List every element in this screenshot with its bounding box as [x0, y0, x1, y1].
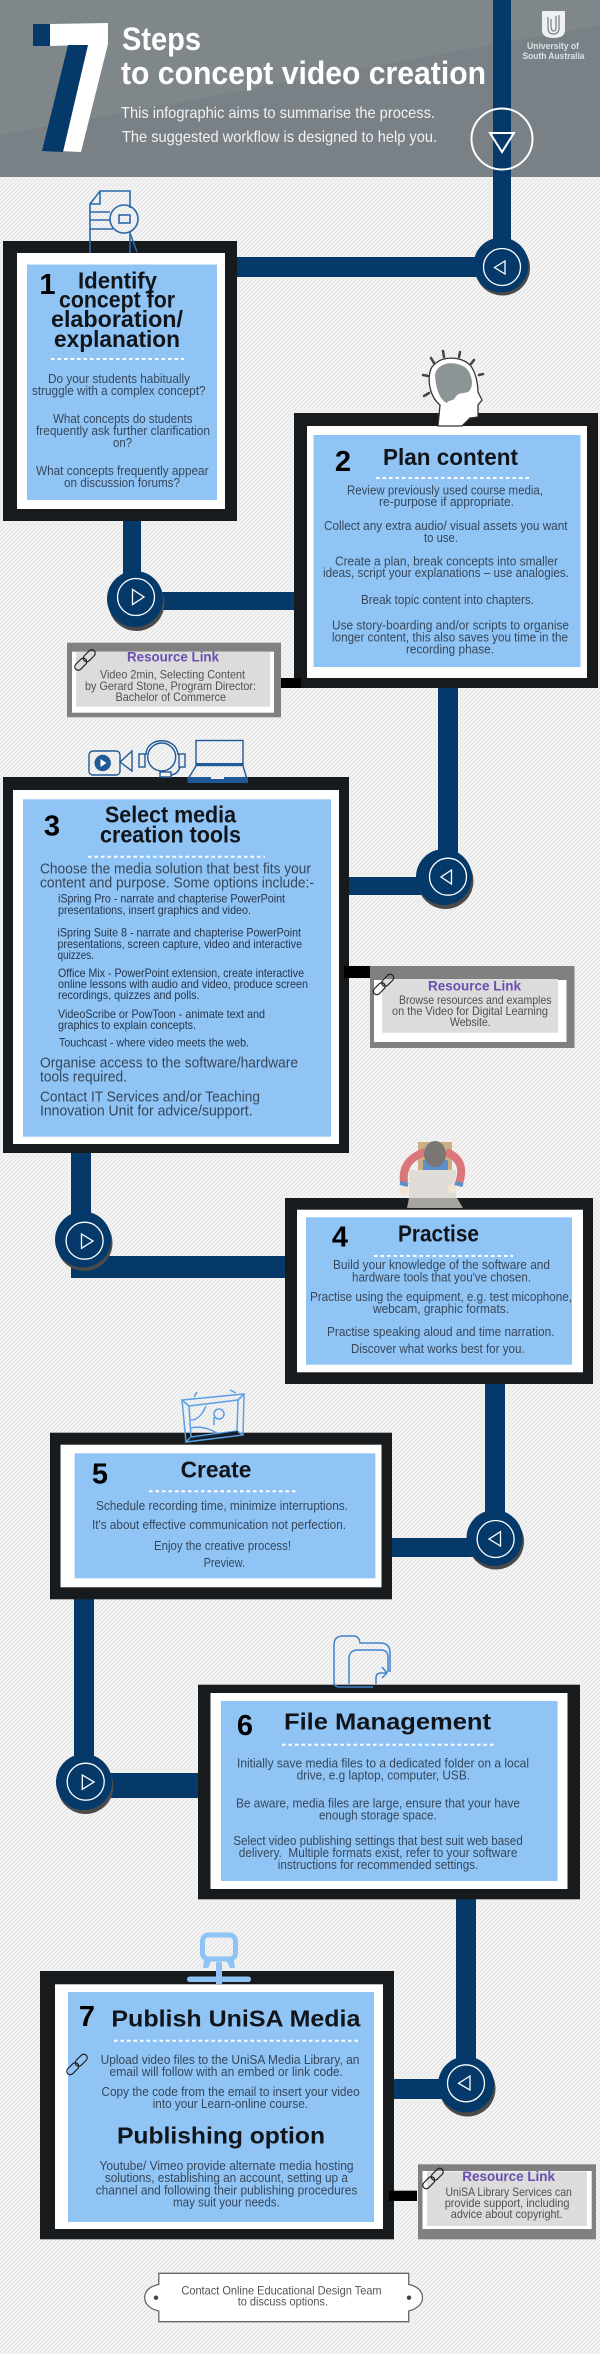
- tool options list: quizzes.: [58, 948, 94, 962]
- body text: step 5: Preview.: [204, 1555, 245, 1570]
- body text: step 5: Schedule recording time, minimize interruptions.: [96, 1498, 348, 1513]
- body text: step 4: webcam, graphic formats.: [372, 1301, 509, 1316]
- intro text: step 3: [40, 861, 314, 892]
- body text: step 6: Initially save media files to a dedicated folder on a local: [237, 1755, 529, 1770]
- callout: resource link 1: [67, 643, 301, 717]
- intro text: step 3: content and purpose. Some options include:-: [40, 876, 314, 892]
- body text: step 2: Review previously used course media,: [347, 482, 543, 498]
- icon: head with brain: [423, 351, 483, 426]
- heading: step 3: Select media: [105, 801, 236, 827]
- node: step 4 turn: [55, 1212, 112, 1271]
- panel: step 4: [285, 1198, 593, 1384]
- body text: upload: [101, 2052, 360, 2111]
- body text: step 6: drive, e.g laptop, computer, USB.: [297, 1767, 470, 1782]
- icon: person at laptop: [400, 1141, 463, 1208]
- tool options list: iSpring Suite 8 - narrate and chapterise PowerPoint: [58, 926, 302, 940]
- body text: step 2: re-purpose if appropriate.: [379, 494, 514, 509]
- step number 6: 6: [237, 1710, 253, 1742]
- body text: step 4: [310, 1257, 572, 1356]
- intro text: step 3: Choose the media solution that best fits your: [40, 861, 311, 877]
- tool options list: Touchcast - where video meets the web.: [59, 1036, 249, 1050]
- heading: step 2: Plan content: [383, 444, 518, 470]
- heading: step 6: File Management: [284, 1708, 491, 1734]
- body text: step 4: Discover what works best for you.: [351, 1341, 525, 1356]
- closing text: step 3: Organise access to the software/hardware: [40, 1055, 298, 1071]
- tool options list: Office Mix - PowerPoint extension, create interactive: [58, 966, 304, 980]
- body text: step 2: to use.: [424, 530, 458, 545]
- body text: step 1: Do your students habitually: [48, 371, 190, 386]
- body text: step 2: Break topic content into chapters.: [361, 592, 534, 607]
- connector road: step 4 to step 5: [392, 1384, 505, 1557]
- step number 1: 1: [39, 269, 56, 301]
- node: step 2 turn: [107, 571, 164, 631]
- panel: step 1: [3, 241, 237, 521]
- panel: step 5: [50, 1433, 392, 1599]
- connector road: header to step 1: [237, 0, 511, 277]
- body text: step 1: What concepts frequently appear: [36, 463, 209, 478]
- connector road: step 5 to step 6: [74, 1599, 200, 1798]
- body text: upload: into your Learn-online course.: [153, 2096, 308, 2111]
- step number 7: 7: [79, 2001, 95, 2033]
- body text: step 1: struggle with a complex concept?: [32, 383, 206, 398]
- panel: step 2: [294, 413, 598, 688]
- node: step 7 turn: [438, 2056, 496, 2116]
- resource link text: on the Video for Digital Learning: [392, 1004, 548, 1018]
- resource link text: Browse resources and examples: [399, 993, 552, 1007]
- body text: step 2: Collect any extra audio/ visual assets you want: [324, 518, 568, 533]
- heading: step 1: concept for: [59, 286, 175, 312]
- callout: resource link 3: [389, 2164, 596, 2239]
- node: step 6 turn: [56, 1754, 114, 1814]
- heading: step 1: elaboration/: [51, 306, 184, 332]
- body text: step 1: What concepts do students: [53, 411, 193, 426]
- resource link text: by Gerard Stone, Program Director:: [85, 679, 256, 693]
- tool options list: VideoScribe or PowToon - animate text and: [58, 1007, 265, 1021]
- resource link text: UniSA Library Services can: [446, 2185, 572, 2199]
- icon: chain link: [421, 2167, 445, 2190]
- body text: step 1: [32, 371, 210, 490]
- contact text: to discuss options.: [238, 2295, 328, 2309]
- resource link heading: Resource Link: [127, 649, 219, 665]
- body text: upload: email will follow with an embed or link code.: [110, 2064, 343, 2079]
- body text: upload: Upload video files to the UniSA Media Library, an: [101, 2052, 359, 2067]
- connector road: step 1 to step 2: [123, 521, 296, 610]
- title: Steps: [122, 21, 201, 57]
- body text: publishing option: [96, 2158, 358, 2209]
- icon: university logo: [542, 11, 565, 38]
- title: [121, 21, 486, 91]
- closing text: step 3: [40, 1055, 298, 1120]
- node: step 5 turn: [466, 1510, 524, 1570]
- body text: step 2: Create a plan, break concepts into smaller: [335, 554, 559, 568]
- header band: [0, 0, 600, 177]
- body text: publishing option: solutions, establishing an account, setting up a: [105, 2170, 349, 2185]
- body text: step 4: Practise using the equipment, e.g. test micophone,: [310, 1289, 572, 1304]
- logo text: South Australia: [522, 51, 585, 61]
- resource link text: Website.: [450, 1015, 491, 1029]
- intro text: The suggested workflow is designed to help you.: [122, 129, 437, 146]
- heading: step 1: [51, 268, 184, 352]
- resource link text: advice about copyright.: [451, 2207, 563, 2221]
- tool options list: presentations, screen capture, video and interactive: [58, 937, 302, 951]
- body text: publishing option: may suit your needs.: [173, 2194, 280, 2209]
- body text: upload: Copy the code from the email to insert your video: [101, 2084, 360, 2099]
- step number 4: 4: [332, 1222, 348, 1254]
- body text: publishing option: channel and following their publishing procedures: [96, 2182, 358, 2197]
- icon: chain link: [372, 973, 395, 996]
- closing text: step 3: Contact IT Services and/or Teaching: [40, 1089, 260, 1105]
- connector road: step 6 to step 7: [394, 1899, 476, 2099]
- tool options list: online lessons with audio and video, produce screen: [58, 977, 308, 991]
- body text: step 5: [92, 1498, 348, 1570]
- big numeral 7: [33, 23, 108, 152]
- body text: step 2: Use story-boarding and/or scripts to organise: [332, 618, 569, 632]
- heading: step 4: Practise: [398, 1221, 479, 1247]
- resource link text: provide support, including: [445, 2196, 570, 2210]
- body text: step 4: Practise speaking aloud and time narration.: [327, 1324, 554, 1339]
- body text: step 6: delivery. Multiple formats exist, refer to your software: [239, 1845, 517, 1860]
- panel: step 3: [3, 777, 349, 1153]
- icon: start arrow circle: [472, 108, 532, 170]
- icon: laptop: [188, 740, 248, 783]
- body text: step 6: [233, 1755, 529, 1872]
- heading: step 3: creation tools: [100, 822, 241, 848]
- body text: step 4: hardware tools that you've chosen.: [352, 1269, 531, 1284]
- panel: step 6: [198, 1685, 580, 1899]
- title: to concept video creation: [121, 55, 486, 91]
- heading: step 1: Identify: [78, 268, 157, 294]
- icon: document with magnifier: [90, 191, 138, 253]
- connector road: step 3 to step 4: [71, 1153, 286, 1278]
- icon: chain link: [65, 2053, 89, 2076]
- icon: framed picture sketch: [182, 1390, 244, 1442]
- tool options list: iSpring Pro - narrate and chapterise PowerPoint: [58, 892, 286, 906]
- body text: step 1: on discussion forums?: [64, 475, 180, 490]
- contact plaque: [145, 2273, 422, 2322]
- contact text: [181, 2284, 382, 2309]
- node: step 3 turn: [416, 849, 474, 909]
- closing text: step 3: tools required.: [40, 1070, 127, 1086]
- logo text: [522, 41, 585, 61]
- body text: step 6: instructions for recommended settings.: [278, 1857, 478, 1872]
- body text: step 1: frequently ask further clarification: [36, 423, 210, 438]
- panel: step 7: [40, 1971, 394, 2239]
- resource link heading: Resource Link: [428, 978, 521, 994]
- icon: headset: [139, 741, 185, 777]
- body text: step 2: ideas, script your explanations – use analogies.: [323, 565, 569, 580]
- closing text: step 3: Innovation Unit for advice/support.: [40, 1104, 253, 1120]
- intro text: [121, 105, 437, 146]
- icon: network monitor: [187, 1935, 251, 1984]
- resource link heading: Resource Link: [462, 2168, 555, 2184]
- tool options list: graphics to explain concepts.: [58, 1018, 196, 1032]
- heading: step 7: Publish UniSA Media: [111, 2006, 361, 2032]
- body text: step 6: Select video publishing settings that best suit web based: [233, 1833, 523, 1848]
- callout: resource link 2: [344, 966, 574, 1048]
- tool options list: [58, 892, 308, 1050]
- logo text: University of: [527, 41, 580, 51]
- resource link text: [445, 2185, 572, 2221]
- body text: step 2: longer content, this also saves you time in the: [332, 630, 568, 644]
- node: step 1 turn: [474, 238, 530, 296]
- icon: camera: [89, 751, 132, 775]
- contact text: Contact Online Educational Design Team: [181, 2284, 382, 2298]
- tool options list: presentations, insert graphics and video.: [58, 903, 251, 917]
- heading: step 3: [100, 801, 241, 848]
- body text: step 2: [323, 482, 569, 656]
- heading: publishing option: Publishing option: [117, 2123, 325, 2149]
- body text: step 6: Be aware, media files are large, ensure that your have: [236, 1795, 520, 1810]
- resource link text: Bachelor of Commerce: [116, 690, 226, 704]
- step number 3: 3: [44, 810, 60, 842]
- resource link text: [392, 993, 552, 1029]
- resource link text: Video 2min, Selecting Content: [100, 668, 246, 682]
- intro text: This infographic aims to summarise the process.: [121, 105, 435, 122]
- heading: step 5: Create: [181, 1456, 251, 1482]
- tool options list: recordings, quizzes and polls.: [58, 988, 200, 1002]
- body text: publishing option: Youtube/ Vimeo provide alternate media hosting: [100, 2158, 354, 2173]
- icon: chain link: [73, 648, 97, 672]
- body text: step 5: Enjoy the creative process!: [154, 1538, 291, 1553]
- heading: step 1: explanation: [54, 326, 180, 352]
- body text: step 4: Build your knowledge of the software and: [333, 1257, 550, 1272]
- resource link text: [85, 668, 256, 704]
- body text: step 2: recording phase.: [406, 642, 494, 656]
- icon: folders: [334, 1636, 390, 1687]
- connector road: step 2 to step 3: [349, 688, 458, 895]
- body text: step 1: on?: [113, 435, 132, 450]
- body text: step 5: It's about effective communication not perfection.: [92, 1517, 346, 1532]
- step number 5: 5: [92, 1458, 108, 1490]
- body text: step 6: enough storage space.: [319, 1807, 437, 1822]
- step number 2: 2: [335, 446, 351, 478]
